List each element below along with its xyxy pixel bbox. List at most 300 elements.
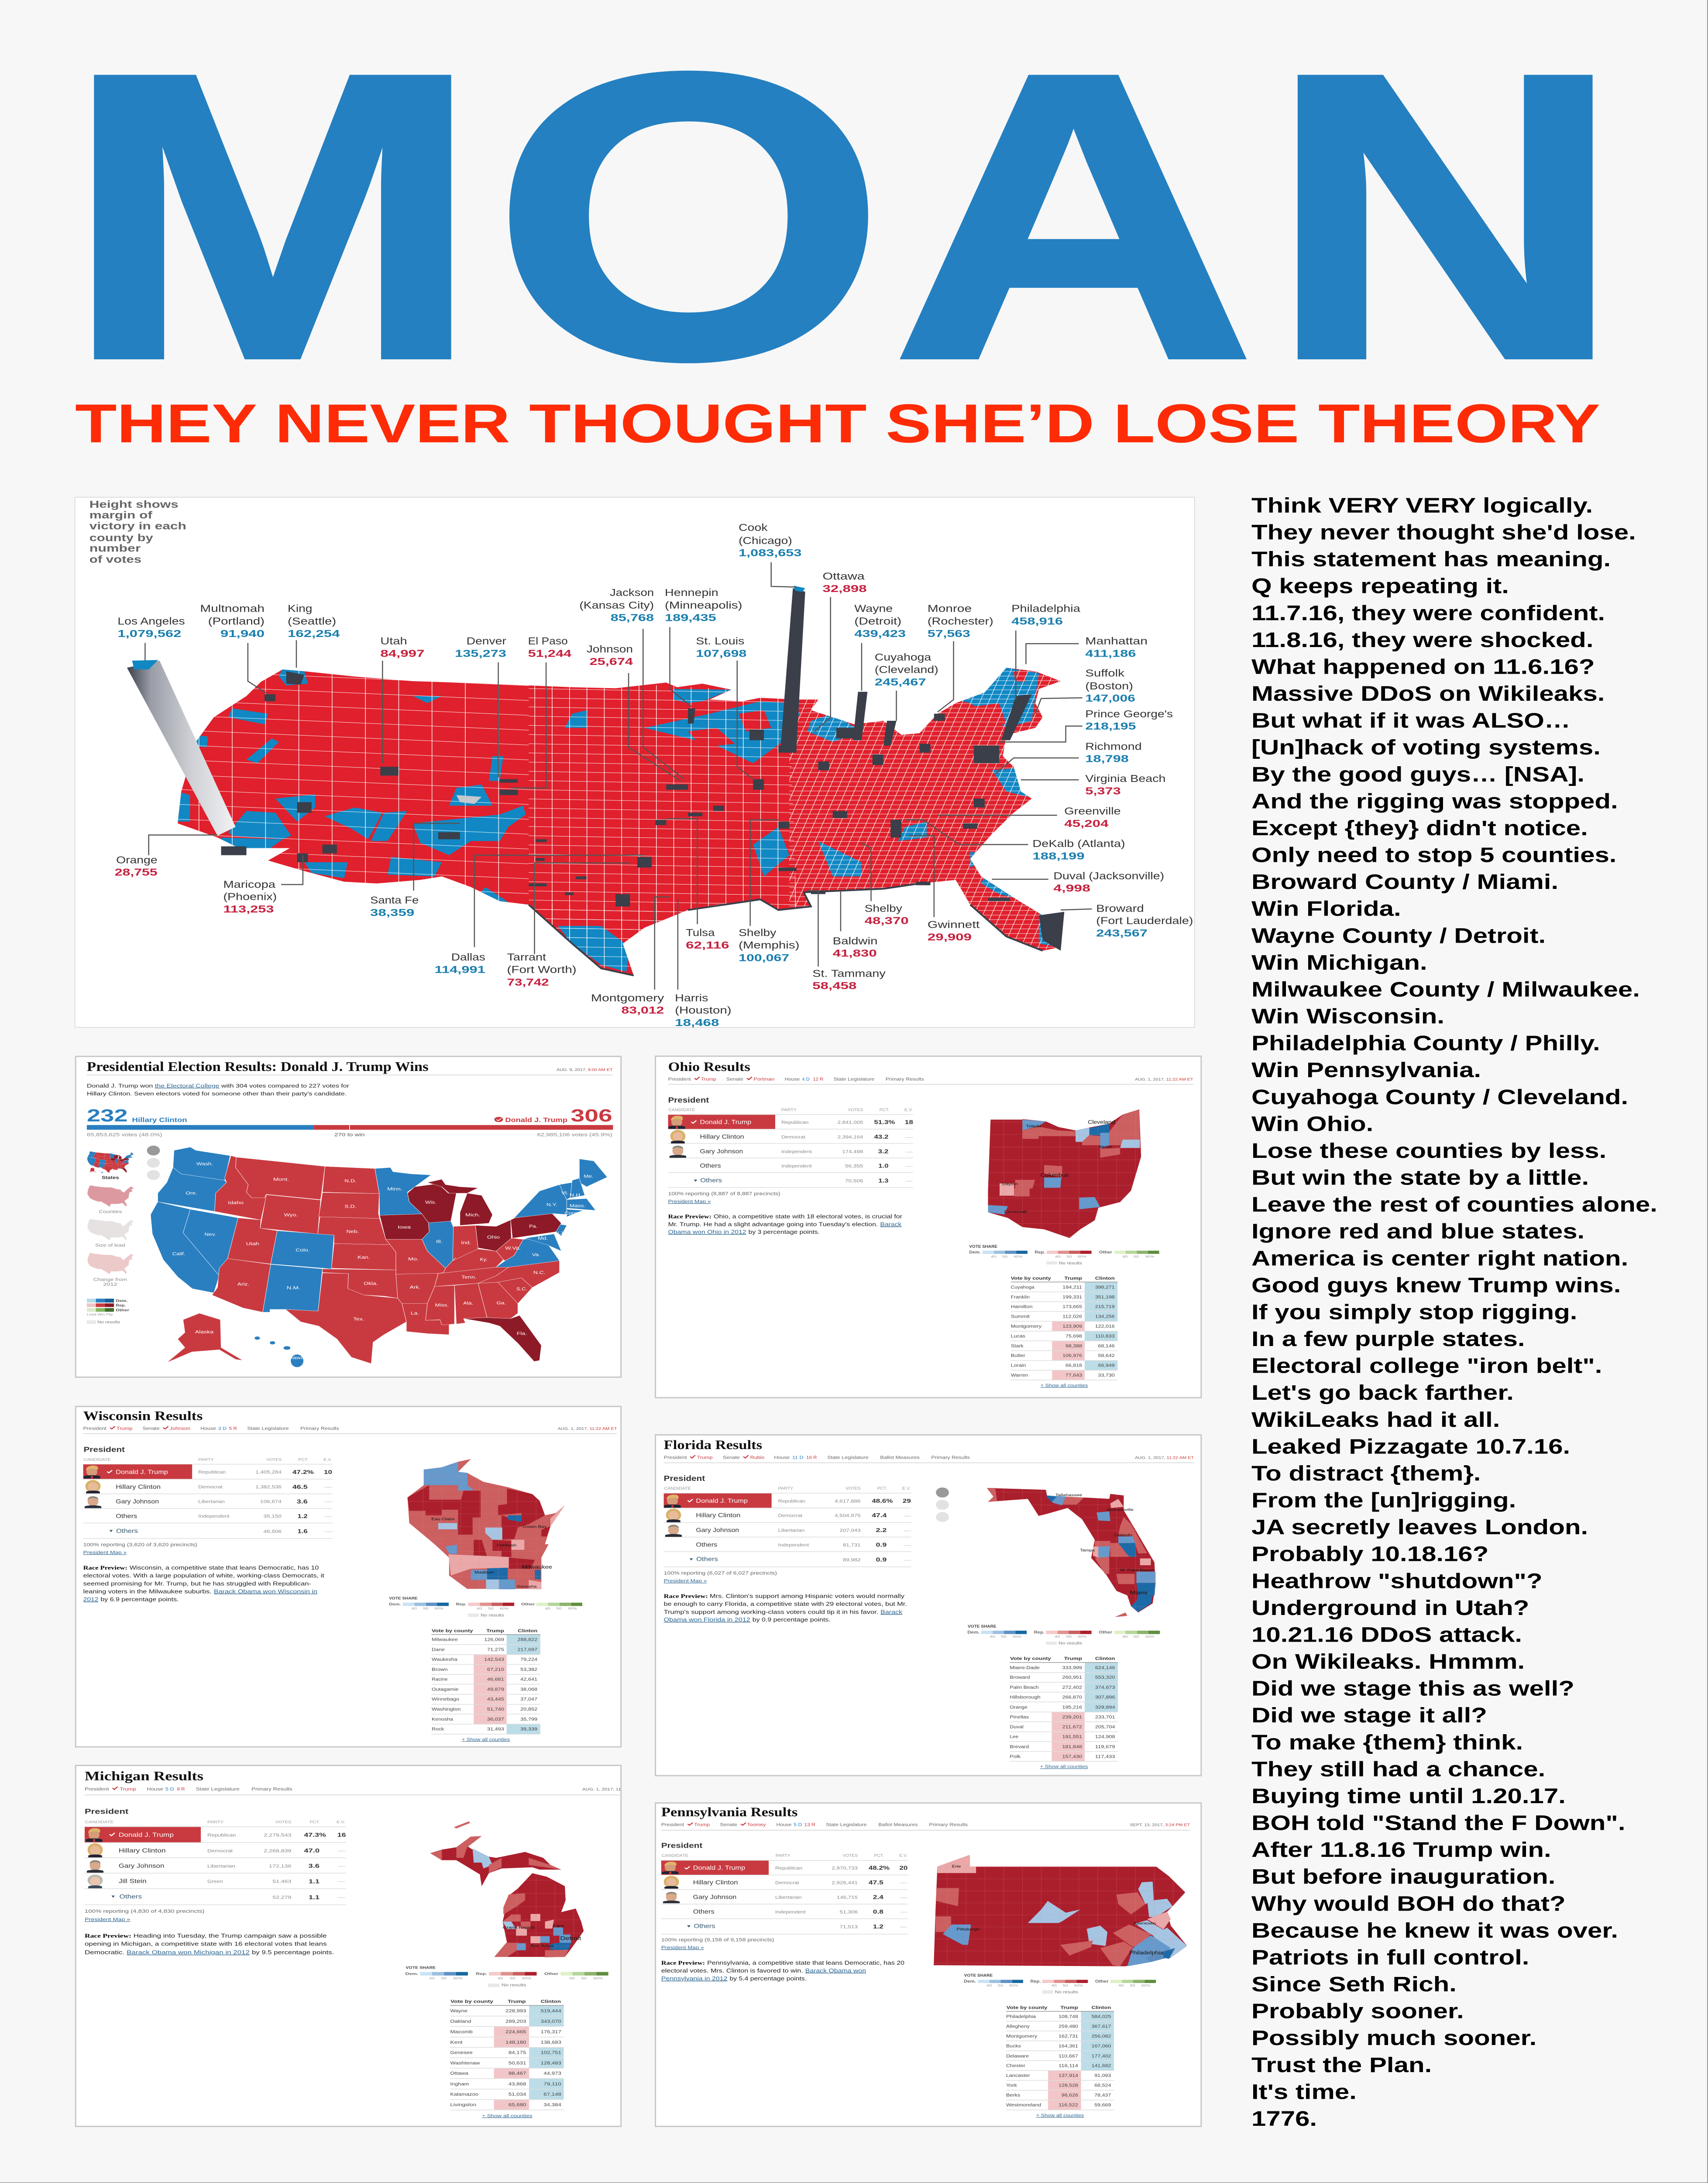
race preview: Obama won Ohio in 2012 [668,1229,746,1235]
results table: President: PCT. [880,1108,889,1112]
label: Richmond [1085,741,1142,764]
table: vote by county: Outagamie [432,1687,459,1692]
table: vote by county: 106,976 [1062,1353,1082,1358]
table: vote by county: 98,388 [1065,1343,1082,1348]
legend: vote share: 60% [1009,1984,1018,1987]
label: Ottawa [822,571,867,595]
legend: vote share: 50 [556,1607,562,1611]
vote totals: 65,853,625 votes (48.0%) [87,1132,162,1137]
state labels: Wash. [196,1161,213,1167]
label: Tulsa: 62,116 [686,940,729,951]
results table: President: VOTES [845,1487,861,1491]
table: vote by county: 66,949 [1098,1363,1115,1368]
table: vote by county: Dane [432,1647,445,1652]
navigation: Primary Results [300,1426,339,1431]
state labels: Tex. [353,1317,364,1322]
timestamp: SEPT. 13, 2017, 3:24 PM ET [1130,1823,1190,1827]
label: Gwinnett: 29,909 [928,931,972,943]
heading: Pennsylvania Results [661,1805,797,1819]
table: vote by county: 157,430 [1062,1754,1082,1759]
results table: President: 2,394,164 [838,1134,863,1140]
results table: President: 1.1 [309,1894,320,1901]
race preview: by 5.4 percentage points. [730,1976,807,1982]
navigation: President [668,1077,691,1081]
electoral tally [87,1105,612,1125]
legend: vote share: 50 [1062,1984,1068,1987]
text block: theory column: Win Florida. [1251,897,1401,920]
state labels: N.D. [344,1178,357,1184]
results table: President: 1,405,284 [255,1470,282,1474]
spike: Wayne [853,692,867,740]
state labels: Utah [246,1242,259,1246]
results table: President: Libertarian [198,1499,225,1504]
legend: vote share: 40 [498,1976,503,1980]
legend: vote share: 60% [1013,1635,1021,1639]
title [63,0,1623,443]
label: Philadelphia: Philadelphia [1011,603,1081,614]
race preview: be enough to carry Florida, a competitive state with 29 electoral votes, but Mr. [664,1601,907,1607]
table: vote by county: 67,210 [487,1667,504,1672]
county map: Wisconsin: Eau Claire [431,1517,454,1521]
timestamp: AUG. 1, 2017, 11 [582,1788,621,1791]
vote totals: 270 to win [334,1132,365,1137]
table: vote by county: 329,894 [1095,1704,1115,1710]
intro text [87,1083,349,1097]
table: vote by county: Ingham [450,2081,469,2087]
table: vote by county: Lee [1010,1734,1018,1739]
label: Montgomery: 83,012 [621,1005,664,1016]
label: Shelby Memphis: Shelby [739,927,776,939]
text block: theory column: Good guys knew Trump wins. [1251,1274,1621,1297]
callout lines [145,562,1092,990]
results table: President: President [85,1807,128,1815]
results table: President: President [668,1096,709,1104]
table: vote by county: Bucks [1006,2044,1021,2049]
label: Multnomah: 91,940 [220,628,265,639]
table: vote by county: 43,868 [509,2081,526,2087]
label: Shelby [865,903,909,926]
county map: Florida: Miami [1130,1590,1147,1596]
label: Harris: (Houston) [675,1005,732,1016]
navigation: Ballot Measures [880,1455,920,1460]
legend: vote share: Rep. [476,1972,487,1976]
results table: President: 2.2 [876,1527,887,1533]
text block: theory column: 10.21.16 DDoS attack. [1251,1623,1522,1646]
text block: theory column: But what if it was ALSO… [1251,709,1571,732]
table: vote by county: Ottawa [450,2071,468,2076]
navigation [661,1822,968,1827]
results table: President: Gary Johnson [700,1148,743,1154]
table: vote by county: 215,719 [1095,1304,1115,1309]
results table: President: Gary Johnson [693,1894,736,1901]
intro text: Hillary Clinton. Seven electors voted for someone other than their party's candidate. [87,1091,347,1097]
results table: President: Others [700,1162,721,1169]
timestamp: AUG. 9, 2017, 9:00 AM ET [557,1068,613,1072]
legend: vote share: 60% [1014,1255,1023,1259]
text block: theory column: This statement has meaning. [1251,547,1611,571]
results table: President: — [900,1910,907,1914]
results table: President: Libertarian [775,1895,802,1900]
zoom controls [147,1146,160,1180]
legend: vote share: 50 [488,1607,494,1611]
label: St. Tammany [812,968,886,992]
race preview: Pennsylvania, a competitive state that leans Democratic, has 20 [707,1960,904,1966]
map thumbnails [87,1151,134,1287]
table: vote by county: 162,731 [1058,2034,1078,2039]
race preview: 2012 [83,1596,98,1603]
results table: President: 174,498 [842,1149,863,1154]
results table: President [85,1807,346,1905]
results table: President: 0.8 [873,1908,883,1915]
navigation: President [661,1822,684,1827]
thumbnail: change from 2012 [87,1253,134,1287]
text block: theory column: Except {they} didn't notice. [1251,816,1588,840]
table: vote by county: 624,146 [1095,1665,1115,1670]
navigation [668,1077,924,1081]
results table: President: President [83,1445,125,1453]
navigation: House [147,1787,163,1791]
label: Johnson [587,644,633,667]
table: vote by county: Livingston [450,2102,476,2107]
results table: President: Hillary Clinton [693,1880,738,1886]
state labels: Iowa [398,1225,411,1230]
navigation: House [776,1822,791,1827]
results table: President: 47.2% [292,1469,314,1475]
state labels: Ga. [496,1301,506,1305]
race preview: electoral votes. With a large population of white, working-class Democrats, it [83,1572,324,1579]
legend: vote share: 50 [1134,1635,1139,1639]
results table: President: — [900,1880,907,1885]
table: vote by county: 35,799 [520,1717,537,1722]
timestamp: AUG. 1, 2017, 11:22 AM ET [558,1427,617,1431]
label: Monroe: (Rochester) [928,616,993,627]
thumbnail: change from 2012: 2012 [103,1282,117,1287]
label: Harris: 18,468 [675,1017,719,1029]
table: vote by county: 96,626 [1062,2093,1078,2098]
legend: vote share: VOTE SHARE [389,1596,418,1601]
table: vote by county: 110,833 [1095,1333,1115,1339]
table: vote by county: Lancaster [1006,2073,1030,2078]
navigation: Senate [143,1426,160,1431]
county map: Ohio: Cincinnati [1004,1210,1027,1214]
results table: President: VOTES [842,1853,858,1858]
text block: theory column: Q keeps repeating it. [1251,574,1509,598]
label: Baldwin [833,935,878,959]
county map: Michigan: Flint [553,1924,564,1928]
text block: theory column: Electoral college "iron belt". [1251,1354,1602,1377]
results table: President: CANDIDATE [85,1820,113,1824]
results table: President: 2,268,839 [264,1848,291,1853]
results table: President [83,1445,333,1539]
state labels: Alaska [195,1329,213,1335]
results table: President: Donald J. Trump [116,1469,168,1475]
label: Monroe: Monroe [928,603,972,614]
state labels: S.D. [344,1204,357,1209]
legend: vote share: 50 [1002,1255,1008,1259]
legend: vote share: No results [1059,1261,1082,1265]
table: vote by county: Kent [450,2040,463,2045]
results table: President: 81,731 [843,1542,861,1547]
label: Broward [1096,903,1193,939]
label: Johnson: 25,674 [590,656,633,667]
results table: President: PARTY [776,1853,790,1858]
table: vote by county: Westmoreland [1006,2103,1041,2108]
label: Wayne [854,603,906,639]
table: vote by county: Orange [1010,1704,1028,1710]
text block: theory column: What happened on 11.6.16? [1251,655,1595,678]
map note: height shows margin: margin of [89,510,152,521]
label: Hennepin: Hennepin [665,587,718,599]
legend: vote share: 50 [1134,1255,1139,1259]
table: vote by county [1011,1275,1117,1388]
results table: President: Others [116,1527,138,1534]
navigation: Trump [117,1426,132,1431]
results table: President: 2,841,005 [838,1119,863,1125]
table: vote by county: + Show all counties [1036,2113,1084,2118]
county map: Michigan [430,1821,584,1957]
reporting status [661,1937,774,1950]
table: vote by county: Vote by county [432,1629,473,1633]
results table: President: CANDIDATE [83,1458,111,1462]
table: vote by county: 58,642 [1098,1353,1115,1358]
map legend: Lead Win Flip [87,1313,113,1316]
table: vote by county: 67,148 [543,2092,561,2097]
text block: theory column: Heathrow "shutdown"? [1251,1569,1543,1593]
results table: President: Independent [778,1542,809,1547]
race preview: Heading into Tuesday, the Trump campaign saw a possible [134,1932,327,1939]
navigation: Primary Results [886,1077,924,1081]
text block: theory column: But before inauguration. [1251,1865,1555,1888]
results table: President: E.V. [904,1108,913,1112]
thumbnail: counties: Counties [99,1209,122,1214]
results table: President: 47.3% [304,1832,326,1838]
legend: vote share: 40 [429,1976,435,1980]
race preview: Ohio, a competitive state with 18 electoral votes, is crucial for [714,1213,902,1220]
results table: President: 172,136 [269,1863,291,1869]
label: DeKalb: 188,199 [1032,850,1085,862]
table: vote by county: 177,402 [1092,2054,1111,2059]
navigation: State Legislature [833,1077,874,1081]
results table: President: Libertarian [207,1863,235,1869]
navigation: State Legislature [826,1822,867,1827]
navigation: Trump [120,1787,136,1791]
results table: President: 146,715 [837,1895,858,1900]
panel: Ohio results [656,1056,1201,1398]
text block: theory column: Only need to stop 5 counties. [1251,843,1616,867]
table: vote by county: 374,673 [1095,1684,1115,1690]
table: vote by county: 49,879 [487,1687,504,1692]
table: vote by county: 184,211 [1062,1284,1082,1290]
label: Utah: Utah [380,635,407,647]
label: Shelby: Shelby [865,903,902,914]
table: vote by county: 108,748 [1058,2014,1078,2019]
heading: Florida Results [664,1438,762,1452]
results table: President: PARTY [198,1458,214,1462]
results table: President: 3.2 [878,1148,888,1154]
table: vote by county: 351,198 [1095,1294,1115,1299]
table: vote by county: Lucas [1011,1333,1025,1339]
vote totals: 62,985,106 votes (45.9%) [537,1132,612,1137]
results table: President: Donald J. Trump [700,1119,751,1126]
results table: President: VOTES [848,1108,863,1112]
race preview: Race Preview: [83,1565,127,1571]
label: Santa Fe: 38,359 [370,907,414,919]
results table: President: VOTES [266,1458,282,1462]
text block: theory column: Trust the Plan. [1251,2053,1432,2076]
table: vote by county: + Show all counties [462,1737,510,1742]
table: vote by county: Clinton [541,1999,561,2004]
label: Cook: 1,083,653 [739,547,801,559]
legend: vote share: Rep. [1031,1979,1041,1983]
label: Shelby Memphis: 100,067 [739,952,789,964]
table: vote by county: 33,730 [1098,1372,1115,1377]
electoral tally: 306 [570,1105,612,1125]
table: vote by county: 102,751 [541,2050,561,2055]
navigation: 11 D [792,1455,804,1460]
legend: vote share: 50 [1066,1635,1072,1639]
thumbnail: size of lead: Size of lead [95,1243,125,1248]
label: Hennepin: 189,435 [665,612,716,623]
label: Virginia Beach [1085,773,1165,797]
table: vote by county: Polk [1010,1754,1021,1759]
table: vote by county: 65,680 [509,2102,526,2107]
map note: height shows margin: victory in each [89,520,186,532]
legend: vote share [389,1596,582,1618]
navigation: State Legislature [247,1426,289,1431]
label: Tarrant: 73,742 [507,977,549,988]
text block: theory column: Did we stage it all? [1251,1704,1487,1727]
label: Maricopa: 113,253 [223,903,274,915]
county map: Pennsylvania: Pittsburgh [956,1928,979,1932]
reporting status [668,1191,780,1204]
legend: vote share: Dem. [964,1979,976,1983]
legend: vote share: 40 [1118,1984,1124,1987]
table: vote by county: 123,909 [1062,1323,1082,1329]
label: Los Angeles: Los Angeles [117,616,185,627]
label: Shelby Memphis [739,927,799,964]
reporting status: President Map » [668,1199,711,1204]
county map: Wisconsin: Madison [474,1570,494,1574]
table: vote by county: 343,070 [541,2019,561,2024]
table: vote by county: Warren [1011,1372,1028,1377]
table: vote by county: 68,146 [1098,1343,1115,1348]
table: vote by county: 260,951 [1062,1674,1082,1680]
results table: President: Others [694,1923,715,1930]
results table: President: 47.0 [304,1847,320,1854]
navigation: President [83,1426,107,1431]
table: vote by county: Genesee [450,2050,473,2055]
label: Multnomah: (Portland) [208,616,265,627]
map note: height shows margin: Height shows [89,499,179,510]
race preview [661,1960,904,1982]
legend: vote share: 40 [1052,1984,1057,1987]
navigation: Primary Results [929,1822,968,1827]
label: Virginia Beach: Virginia Beach [1085,773,1165,785]
table: vote by county: 126,069 [484,1637,504,1642]
map legend [87,1299,130,1324]
table: vote by county [1010,1656,1118,1769]
results table: President: Democrat [198,1484,223,1489]
navigation: Ballot Measures [878,1822,918,1827]
results table: President: Independent [198,1514,230,1518]
label: Prince George's [1085,708,1173,732]
legend: vote share: Dem. [389,1602,401,1606]
navigation: 16 R [806,1455,817,1460]
table: vote by county: Allegheny [1006,2024,1030,2029]
results table: President: Independent [775,1910,806,1914]
state labels: Nev. [204,1232,216,1237]
table: vote by county: Washington [432,1707,461,1711]
results table: President: 207,043 [840,1528,861,1533]
table: vote by county: 141,682 [1092,2063,1111,2068]
navigation: State Legislature [196,1787,240,1791]
results table: President: 52,279 [272,1895,291,1900]
state labels: S.C. [516,1287,527,1291]
spike: Los Angeles [127,660,236,836]
race preview: opening in Michigan, a competitive state with 16 electoral votes that leans [85,1941,327,1947]
legend: vote share: Rep. [1034,1630,1045,1635]
county map: Wisconsin: Kenosha [517,1585,537,1589]
timestamp: AUG. 1, 2017, 11:22 AM ET [1135,1078,1193,1081]
legend: vote share: 40 [412,1607,417,1611]
text block: theory column: From the [un]rigging. [1251,1488,1516,1512]
race preview: by 9.5 percentage points. [252,1949,334,1956]
table: vote by county: 367,617 [1092,2024,1111,2029]
map legend: No results [97,1320,120,1324]
subtitle: THEY NEVER THOUGHT SHE’D LOSE THEORY [75,393,1600,454]
text block: theory column: It's time. [1251,2080,1357,2104]
label: Cook: Cook [739,522,768,533]
legend: vote share: 60% [1145,1635,1154,1639]
state labels: Colo. [296,1248,310,1253]
label: St. Tammany: St. Tammany [812,968,886,979]
reporting status: 100% reporting (3,620 of 3,620 precincts) [83,1543,197,1548]
table: vote by county: Vote by county [1007,2005,1048,2010]
text block: theory column: Win Ohio. [1251,1112,1373,1136]
county map of United States [127,585,1079,982]
table: vote by county: Vote by county [450,1999,494,2004]
text block: theory column: Probably sooner. [1251,1999,1464,2023]
table: vote by county: Clinton [1095,1656,1115,1661]
county map: Michigan: Grand Rapids [503,1925,535,1930]
state labels: Ark. [409,1285,420,1290]
legend: vote share: 50 [1066,1255,1072,1259]
county map: Florida: Orlando [1114,1533,1132,1537]
race preview [85,1932,334,1956]
results table: President: CANDIDATE [662,1853,688,1858]
table: vote by county: Hillsborough [1010,1694,1041,1700]
table: vote by county: Clinton [1095,1275,1115,1281]
table: vote by county: Palm Beach [1010,1684,1039,1690]
legend: vote share: 50 [581,1976,587,1980]
table: vote by county: Pinellas [1010,1714,1029,1719]
text block: theory column: Lose these counties by less. [1251,1139,1606,1163]
table: vote by county [1006,2005,1114,2118]
text block: theory column: Probably 10.18.16? [1251,1542,1488,1566]
county map: Ohio: Cleveland [1088,1119,1115,1125]
label: King: King [288,603,312,614]
legend: vote share: 40 [1055,1635,1060,1639]
county map: Wisconsin [407,1459,565,1589]
table: vote by county: 43,445 [487,1697,504,1701]
label: Prince George's: Prince George's [1085,708,1173,720]
table: vote by county: Philadelphia [1006,2014,1036,2019]
table: vote by county: 239,201 [1062,1714,1082,1719]
results table: President: 106,674 [260,1499,282,1504]
race preview: Race Preview: [664,1593,708,1599]
legend: vote share: Other [521,1602,535,1606]
results table: President: 46,506 [264,1529,282,1534]
